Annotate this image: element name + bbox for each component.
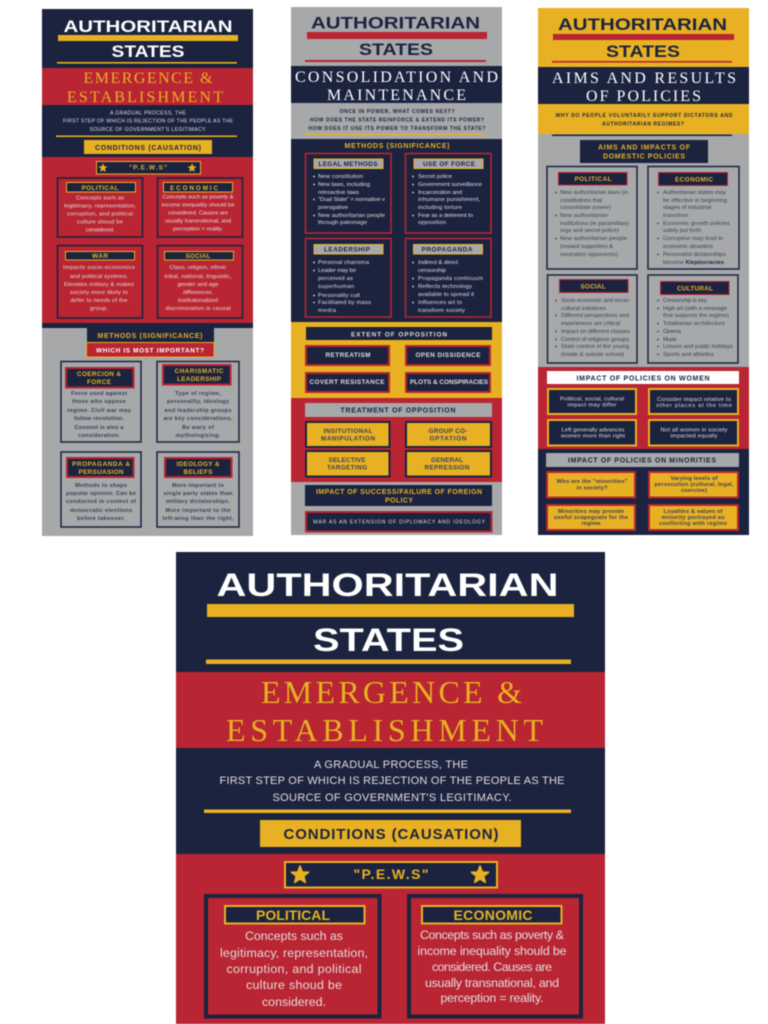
section: treatment of opposition: TARGETING — [327, 464, 367, 472]
heading: emergence and establishment — [226, 674, 543, 748]
card: propaganda and persuasion — [61, 452, 141, 527]
card: cultural policies: Totalitarian architecture — [663, 321, 726, 327]
methods section background and heading — [291, 139, 502, 322]
section: impact of policies on minorities: conflicting with regime — [659, 521, 727, 527]
heading: aims and impacts of domestic policies — [580, 140, 708, 163]
section: impact of policies on women: impacted equally — [670, 434, 718, 440]
intro text and conditions band: A GRADUAL PROCESS, THE — [314, 759, 468, 771]
card: leadership: perceived as — [318, 276, 353, 282]
card: coercion and force: Consent is also a — [74, 425, 124, 431]
card: social: differences. — [183, 290, 213, 296]
card: economic policies: stages of industrial — [663, 205, 711, 211]
heading: emergence and establishment: EMERGENCE & — [261, 674, 522, 710]
card: legal methods: New authoritarian people — [318, 213, 386, 219]
card: economic: ECONOMIC — [454, 907, 532, 923]
card: war: Elevates military & makes — [64, 282, 134, 288]
card: coercion and force: regime. Civil war may — [67, 408, 132, 414]
section: impact of policies on minorities: IMPACT OF POLICIES ON MINORITIES — [568, 458, 716, 464]
card: social: tribal, national, linguistic, — [164, 274, 232, 280]
card: ideology and beliefs: More important to the — [166, 508, 230, 514]
section: impact of policies on minorities: persecution (cultural, legal, — [654, 482, 734, 488]
card: coercion and force — [61, 362, 141, 442]
heading: emergence and establishment: EMERGENCE & — [84, 70, 213, 87]
card: propaganda: available to spread it — [418, 292, 474, 298]
card: ideology and beliefs — [157, 452, 239, 527]
box: war as extension of diplomacy: WAR AS AN EXTENSION OF DIPLOMACY AND IDEOLOGY — [313, 520, 486, 526]
card: political: POLITICAL — [256, 907, 330, 923]
section: treatment of opposition: REPRESSION — [424, 464, 470, 472]
card: political — [58, 178, 142, 237]
card: propaganda — [406, 238, 491, 317]
card: leadership: Leader may be — [318, 268, 357, 274]
intro question: AUTHORITARIAN REGIMES? — [602, 122, 684, 128]
intro questions: HOW DOES IT USE ITS POWER TO TRANSFORM THE STATE? — [308, 126, 486, 132]
card: war: and political systems. — [70, 274, 128, 280]
intro text and conditions band: SOURCE OF GOVERNMENT'S LEGITIMACY. — [272, 792, 512, 804]
card: political: considered. — [262, 995, 326, 1009]
card: economic: perception = reality. — [173, 226, 223, 232]
card: political policies: New authoritarian — [560, 213, 608, 219]
card: propaganda: censorship — [418, 268, 447, 274]
card: coercion and force: those who oppose — [72, 399, 126, 405]
card: leadership: Personal charisma — [318, 260, 370, 266]
subheading: which is most important: WHICH IS MOST IMPORTANT? — [96, 348, 204, 354]
card: social policies: State control of the young — [561, 344, 629, 350]
card: social policies: Different perspectives and — [561, 313, 629, 319]
card: coercion and force: FORCE — [87, 379, 112, 386]
title: authoritarian states — [305, 14, 487, 62]
card: war — [58, 246, 142, 318]
section: extent of opposition: EXTENT OF OPPOSITION — [351, 332, 447, 338]
title: authoritarian states: AUTHORITARIAN — [558, 16, 727, 34]
section: treatment of opposition: GROUP CO- — [428, 428, 468, 435]
box: war as extension of diplomacy — [306, 512, 492, 532]
card: leadership: Personality cult — [318, 293, 360, 299]
intro text and conditions band: SOURCE OF GOVERNMENT'S LEGITIMACY. — [90, 127, 206, 133]
card: political policies: POLITICAL — [574, 176, 612, 183]
card: ideology and beliefs: BELIEFS — [184, 469, 213, 476]
card: ideology and beliefs: military dictatorships. — [166, 499, 230, 505]
heading: emergence and establishment: ESTABLISHMENT — [226, 712, 543, 748]
card: economic — [409, 896, 581, 1016]
heading: emergence and establishment — [42, 68, 253, 106]
card: social policies: Control of religious groups — [561, 337, 629, 343]
title: authoritarian states: STATES — [359, 41, 433, 59]
card: use of force: inhumane punishment, — [418, 197, 480, 203]
card: economic: considered. Causes are — [168, 210, 229, 216]
intro text and conditions band — [176, 748, 605, 854]
card: political: corruption, and political — [67, 212, 133, 218]
section: treatment of opposition: INSITUTIONAL — [324, 428, 373, 435]
title: authoritarian states: STATES — [313, 622, 464, 658]
card: political: legitimacy, representation, — [220, 946, 368, 960]
section: impact of policies on women: Not all women in society — [660, 428, 728, 434]
card: social policies — [548, 275, 637, 363]
card: legal methods: New constitution — [318, 174, 363, 180]
card: economic policies: safely put forth — [663, 228, 701, 234]
heading: consolidation and maintenance: CONSOLIDATION AND — [295, 69, 498, 86]
card: political — [206, 896, 380, 1016]
card: coercion and force: consideration. — [78, 433, 120, 439]
intro text and conditions band: A GRADUAL PROCESS, THE — [110, 110, 187, 116]
card: cultural policies: Leisure and public holidays — [663, 344, 733, 350]
card: economic: Concepts such as poverty & — [162, 195, 234, 201]
card: economic policies: be effective in beginning — [663, 198, 727, 204]
section: impact of policies on minorities: Loyalties & values of — [664, 509, 723, 515]
card: political: legitimacy, representation, — [64, 204, 136, 210]
methods heading tab — [42, 323, 253, 342]
intro text and conditions band: CONDITIONS (CAUSATION) — [95, 145, 201, 152]
card: legal methods: retroactive laws — [318, 190, 359, 196]
card: cultural policies: that supports the regime) — [663, 313, 729, 319]
card: economic policies — [648, 166, 739, 269]
intro question: WHY DO PEOPLE VOLUNTARILY SUPPORT DICTATORS AND — [556, 113, 733, 119]
card: use of force: Government surveillance — [418, 182, 483, 188]
heading: consolidation and maintenance: MAINTENANCE — [327, 87, 466, 104]
card: political: Concepts such as — [76, 196, 124, 202]
card: ideology and beliefs: single party states than — [164, 491, 233, 497]
card: economic: income inequality should be — [418, 944, 567, 958]
intro questions — [305, 109, 486, 135]
intro question — [538, 104, 749, 136]
title: authoritarian states — [538, 8, 749, 67]
card: economic: Concepts such as poverty & — [420, 928, 565, 942]
panel: emergence and establishment — [42, 9, 253, 536]
box: impact of foreign policy: IMPACT OF SUCCESS/FAILURE OF FOREIGN — [316, 489, 482, 496]
section: impact of policies on minorities: Varying levels of — [670, 476, 718, 482]
card: cultural policies — [648, 275, 738, 363]
section: extent of opposition — [291, 322, 502, 398]
intro questions: ONCE IN POWER, WHAT COMES NEXT? — [340, 109, 454, 115]
intro text and conditions band: FIRST STEP OF WHICH IS REJECTION OF THE PEOPLE AS THE — [63, 118, 234, 124]
card: leadership: superhuman — [318, 284, 354, 290]
intro text and conditions band: CONDITIONS (CAUSATION) — [284, 826, 498, 843]
section: impact of policies on minorities — [538, 449, 749, 535]
methods section background and heading: METHODS (SIGNIFICANCE) — [344, 143, 450, 150]
card: legal methods: "Dual State" = normative v — [318, 197, 385, 203]
card: charismatic leadership: Type of regime, — [175, 391, 221, 397]
card: leadership: media — [318, 308, 337, 314]
card: legal methods: LEGAL METHODS — [318, 161, 378, 168]
title: authoritarian states: AUTHORITARIAN — [64, 18, 232, 36]
intro questions: HOW DOES THE STATE REINFORCE & EXTEND ITS POWER? — [310, 118, 484, 124]
card: propaganda and persuasion: PROPAGANDA & — [72, 461, 130, 468]
card: legal methods: prerogative — [318, 205, 349, 211]
card: economic: ECONOMIC — [170, 185, 218, 192]
card: propaganda and persuasion: conducted in context of — [66, 499, 136, 505]
section: treatment of opposition: TREATMENT OF OPPOSITION — [340, 408, 456, 414]
card: war: defer to needs of the — [70, 298, 128, 304]
card: political: POLITICAL — [82, 185, 119, 192]
card: charismatic leadership: mythologizing. — [176, 433, 221, 439]
card: political policies: consolidate power) — [560, 205, 611, 211]
title: authoritarian states: STATES — [112, 43, 184, 61]
title: authoritarian states: STATES — [606, 43, 680, 61]
card: war: group. — [90, 306, 108, 312]
section: treatment of opposition: OPTATION — [430, 436, 467, 442]
card: social policies: Impact on different classes — [561, 329, 630, 335]
pews banner with stars: "P.E.W.S" — [354, 866, 428, 882]
card: propaganda: Influences art to — [418, 300, 463, 306]
card: use of force: Fear as a deterrent to — [418, 213, 474, 219]
card: charismatic leadership: Be wary of — [182, 425, 214, 431]
heading: aims and results of policies: AIMS AND RESULTS — [552, 70, 736, 87]
card: social: SOCIAL — [186, 253, 211, 260]
section: impact of policies on women: Political, social, cultural — [560, 396, 624, 402]
card: propaganda: PROPAGANDA — [422, 246, 473, 254]
card: social policies: Socio-economic and socio- — [561, 298, 630, 304]
card: social: discrimination is causal — [166, 306, 230, 312]
card: political policies — [547, 166, 637, 269]
card: charismatic leadership: personality, ideology — [167, 399, 230, 405]
intro text and conditions band — [42, 105, 253, 157]
card: war: WAR — [92, 253, 108, 260]
card: social: institutionalized — [178, 298, 218, 304]
card: cultural policies: Censorship is key — [663, 298, 707, 304]
section: extent of opposition: COVERT RESISTANCE — [310, 379, 385, 386]
card: political policies: New authoritarian people — [560, 236, 628, 242]
card: leadership: LEADERSHIP — [324, 246, 371, 254]
title: authoritarian states — [42, 9, 253, 68]
card: use of force: Incarceration and — [418, 190, 462, 196]
card: leadership: Facilitated by mass — [318, 300, 371, 306]
section: impact of policies on women: other places at the time — [656, 403, 733, 409]
heading: consolidation and maintenance — [291, 66, 502, 104]
card: economic: usually transnational, and — [165, 218, 231, 224]
heading: aims and results of policies: OF POLICIES — [586, 88, 701, 105]
card: propaganda and persuasion: popular opinion. Can be — [66, 491, 136, 497]
title: authoritarian states: AUTHORITARIAN — [311, 14, 480, 32]
card: political policies: (reward supporters & — [560, 244, 613, 250]
card: propaganda: Propaganda continuum — [418, 276, 483, 282]
pews banner with stars — [96, 162, 200, 174]
section: impact of policies on minorities: regime — [582, 521, 600, 527]
card: charismatic leadership: CHARISMATIC — [174, 368, 224, 375]
card: economic: perception = reality. — [440, 991, 544, 1005]
card: charismatic leadership: are key considerations. — [164, 416, 233, 422]
card: coercion and force: Force used against — [71, 391, 127, 397]
card: political policies: institutions (ie paramilitary — [560, 221, 629, 227]
card: cultural policies: Music — [663, 337, 677, 343]
box: impact of foreign policy: POLICY — [385, 498, 413, 504]
pews banner with stars: "P.E.W.S" — [129, 164, 167, 172]
card: charismatic leadership — [157, 362, 239, 442]
card: legal methods: New laws, including — [318, 182, 370, 188]
card: propaganda: Reflects technology — [418, 284, 472, 290]
heading: aims and impacts of domestic policies: DOMESTIC POLICIES — [603, 154, 685, 160]
section: extent of opposition: PLOTS & CONSPIRACIES — [410, 379, 489, 386]
section: treatment of opposition — [291, 398, 502, 482]
heading: emergence and establishment: ESTABLISHMENT — [67, 89, 223, 106]
card: social policies: (inside & outside school) — [561, 352, 624, 358]
conditions section background — [42, 157, 253, 323]
card: economic policies: Personalist dictatorships — [663, 252, 726, 258]
card: political: culture shoud be — [77, 220, 124, 226]
section: impact of policies on women: Consider impact relative to — [657, 397, 732, 403]
card: social policies: cultural initiatives — [561, 306, 606, 312]
section: impact of policies on minorities: Minorities may provide — [558, 509, 624, 515]
card: economic policies: Economic growth policies — [663, 221, 730, 227]
section: treatment of opposition: SELECTIVE — [328, 457, 366, 464]
panel: aims and results of policies — [538, 8, 749, 535]
card: political policies: New authoritarian laws (in — [560, 190, 628, 196]
section: extent of opposition: OPEN DISSIDENCE — [416, 352, 481, 359]
card: propaganda and persuasion: before takeover. — [77, 516, 125, 522]
card: use of force: USE OF FORCE — [423, 161, 476, 168]
card: economic policies: economic disasters — [663, 244, 713, 250]
section: impact of policies on women: Left generally advances — [562, 428, 625, 434]
card: political policies: neutralize opponents) — [560, 252, 618, 258]
section: impact of policies on women: impact may differ — [568, 402, 617, 408]
intro text and conditions band: FIRST STEP OF WHICH IS REJECTION OF THE PEOPLE AS THE — [220, 775, 564, 787]
card: cultural policies: Cinema — [663, 329, 682, 335]
section: impact of policies on women: women more than right — [560, 434, 625, 440]
card: social: gender and age — [178, 282, 219, 288]
card: propaganda and persuasion: PERSUASION — [78, 469, 124, 476]
section: extent of opposition: RETREATISM — [326, 352, 370, 359]
card: charismatic leadership: LEADERSHIP — [177, 376, 222, 383]
pews banner with stars — [285, 862, 497, 888]
card: coercion and force: COERCION & — [77, 371, 121, 378]
card: ideology and beliefs: IDEOLOGY & — [176, 461, 220, 468]
card: use of force: including torture — [418, 205, 463, 211]
card: social policies: experiences are critical — [561, 321, 620, 327]
card: cultural policies: High art (with a message — [663, 306, 728, 312]
section: impact of policies on women — [538, 367, 749, 449]
methods heading tab: METHODS (SIGNIFICANCE) — [98, 333, 202, 340]
section: impact of policies on minorities: Who are the "minorities" — [556, 479, 628, 485]
card: political policies: constitutions that — [560, 198, 602, 204]
section: impact of policies on minorities: useful scapegoats for the — [554, 515, 628, 521]
card: coercion and force: follow revolution. — [74, 416, 124, 422]
section: impact of policies on minorities: minority portrayed as — [662, 515, 724, 521]
card: use of force: opposition — [418, 220, 446, 226]
heading: aims and impacts of domestic policies: AIMS AND IMPACTS OF — [598, 144, 691, 152]
card: political: considered. — [86, 228, 115, 234]
card: ideology and beliefs: More important to — [172, 483, 225, 489]
section: impact of policies on minorities: coercive) — [681, 488, 707, 494]
subheading: which is most important — [86, 342, 214, 357]
card: political: corruption, and political — [226, 962, 362, 976]
title: authoritarian states: AUTHORITARIAN — [216, 567, 558, 603]
card: economic: income inequality should be — [162, 203, 235, 209]
card: leadership — [306, 238, 391, 317]
card: economic policies: transition — [663, 213, 688, 219]
card: social: Class, religion, ethnic — [170, 265, 227, 271]
panel: enlarged emergence and establishment — [176, 552, 605, 1024]
panel: consolidation and maintenance — [291, 7, 502, 535]
card: propaganda: Indirect & direct — [418, 260, 458, 266]
card: charismatic leadership: and leadership groups — [164, 408, 232, 414]
card: economic policies: ECONOMIC — [675, 176, 713, 184]
card: war: Impacts socio-economics — [63, 265, 135, 271]
card: political policies: orgs and secret police) — [560, 228, 619, 234]
card: legal methods: through patronage — [318, 220, 368, 226]
card: propaganda and persuasion: democratic elections — [70, 508, 132, 514]
section: impact of policies on minorities: in society? — [576, 486, 608, 492]
card: economic policies: Authoritarian states may — [663, 190, 726, 196]
card: social policies: SOCIAL — [580, 284, 606, 290]
title: authoritarian states — [176, 552, 605, 672]
card: propaganda: transform society — [418, 308, 465, 314]
section: treatment of opposition: GENERAL — [431, 457, 463, 464]
section: treatment of opposition: MANIPULATION — [321, 436, 375, 442]
card: ideology and beliefs: left-wing than the right, — [162, 516, 234, 522]
box: impact of foreign policy — [305, 485, 492, 506]
card: use of force: Secret police — [418, 174, 453, 180]
card: economic: considered. Causes are — [432, 960, 552, 974]
heading: aims and results of policies — [538, 67, 749, 105]
card: economic policies: Corruption may lead to — [663, 236, 724, 242]
card: political: Concepts such as — [245, 929, 343, 943]
card: economic policies: become Kleptocracies — [663, 260, 725, 266]
card: economic — [158, 178, 242, 237]
card: propaganda and persuasion: Methods to shape — [75, 483, 127, 489]
card: legal methods — [306, 154, 391, 233]
section: impact of policies on women: IMPACT OF POLICIES ON WOMEN — [576, 376, 710, 382]
card: political: culture shoud be — [246, 978, 342, 992]
card: cultural policies: Sports and athletics — [663, 352, 714, 358]
card: war: society more likely to — [70, 290, 129, 296]
card: social — [158, 246, 242, 318]
card: economic: usually transnational, and — [425, 976, 559, 990]
card: use of force — [406, 154, 491, 233]
card: cultural policies: CULTURAL — [677, 286, 713, 292]
